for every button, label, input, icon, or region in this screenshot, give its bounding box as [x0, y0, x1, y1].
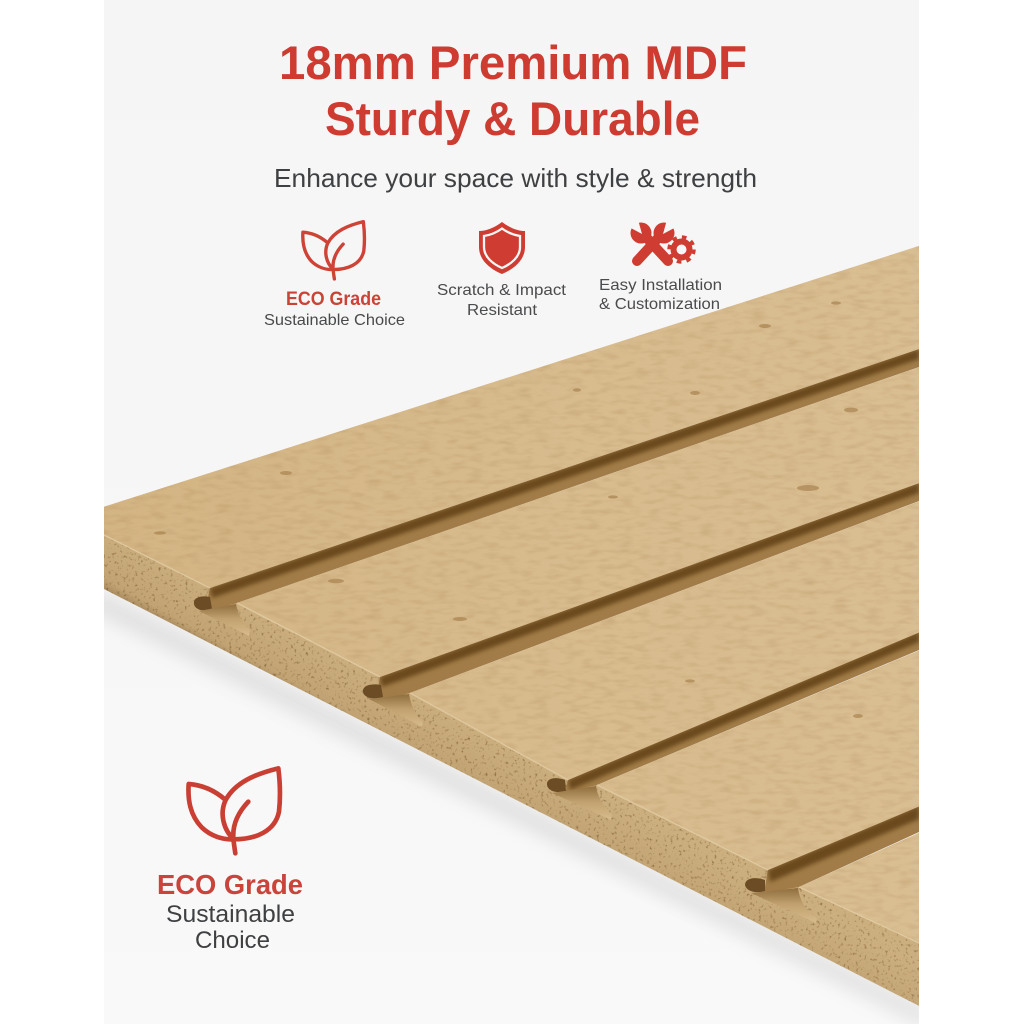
background panel [104, 0, 919, 1024]
board surface flecks [154, 301, 863, 718]
plank 3 [410, 499, 925, 780]
plank 1 [100, 244, 925, 588]
feature: easy installation [599, 216, 722, 313]
feature: scratch and impact resistant [437, 222, 567, 319]
title [279, 36, 747, 145]
icon: small leaf [303, 222, 364, 279]
icon: shield [479, 222, 525, 274]
groove 1 [194, 349, 919, 636]
groove 4 [745, 806, 919, 923]
plank 2 [237, 365, 925, 677]
callout caption: Choice [195, 927, 270, 954]
MDF board photo [90, 244, 930, 1024]
board front edge [100, 533, 925, 1009]
groove 3 [547, 632, 919, 820]
easy installation caption: Easy Installation [599, 277, 722, 294]
easy installation caption: & Customization [599, 296, 720, 313]
callout: eco grade [157, 768, 303, 954]
feature: eco grade [264, 222, 405, 329]
title: 18mm Premium MDF [279, 36, 747, 89]
easy installation caption [599, 277, 722, 313]
plank 5 [799, 830, 925, 946]
board shadow [90, 590, 930, 1024]
sustainable choice caption: Sustainable Choice [264, 312, 405, 329]
scratch and impact caption: Resistant [467, 302, 538, 319]
scratch and impact caption: Scratch & Impact [437, 282, 567, 299]
plank 4 [597, 648, 925, 870]
eco grade label: ECO Grade [286, 289, 381, 310]
scratch and impact caption [437, 282, 567, 319]
callout heading: ECO Grade [157, 869, 303, 900]
plank front highlights [104, 535, 919, 943]
callout caption: Sustainable [166, 901, 295, 928]
groove 2 [363, 483, 919, 727]
callout caption [166, 901, 295, 954]
title: Sturdy & Durable [325, 92, 700, 145]
icon: crossed wrenches and gear [627, 216, 694, 262]
board top surface planks [100, 244, 925, 946]
icon: large leaf [188, 768, 280, 853]
subtitle: Enhance your space with style & strength [274, 163, 757, 193]
